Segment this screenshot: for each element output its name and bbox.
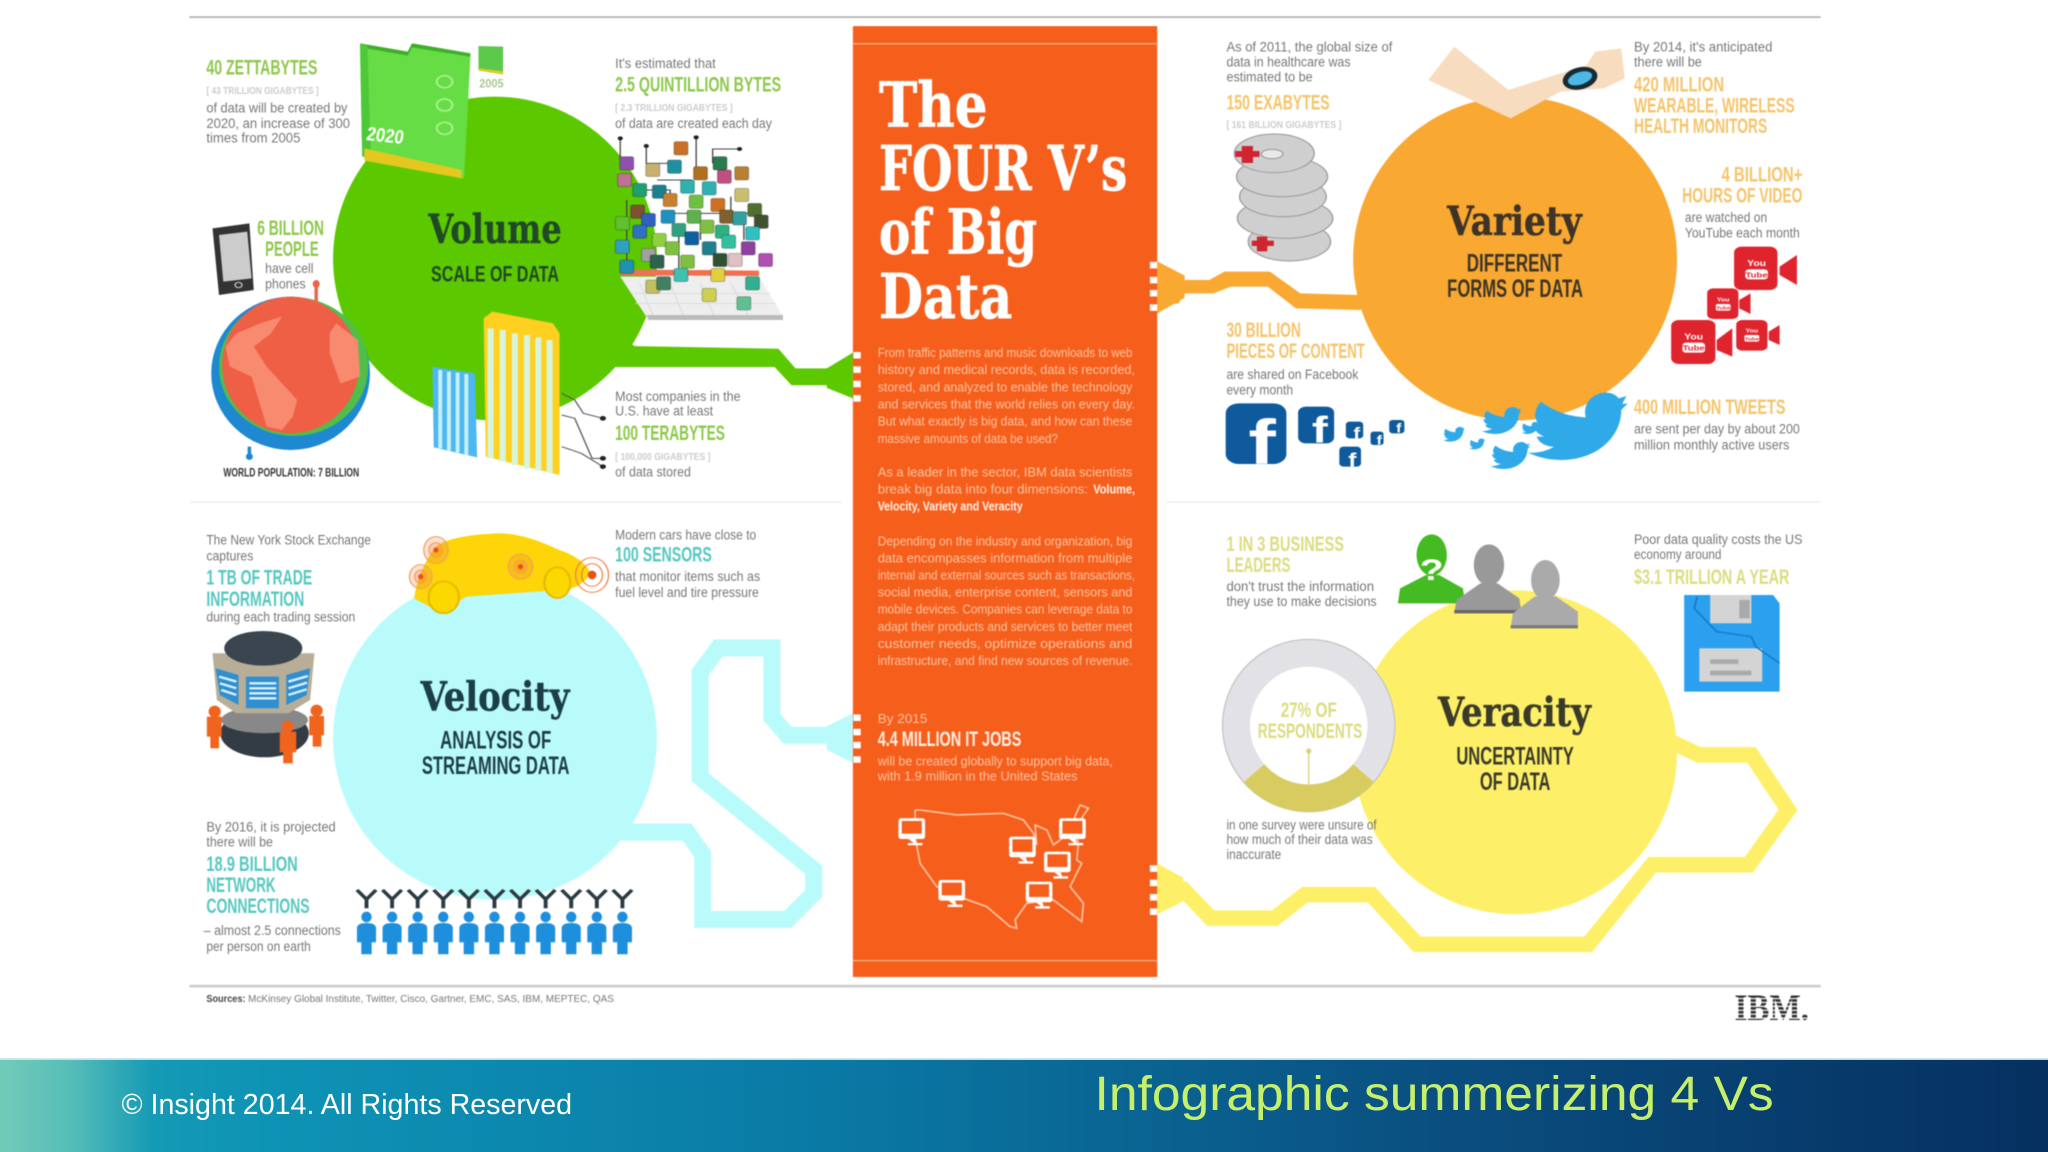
- sources: McKinsey Global Institute, Twitter, Cisco, Gartner, EMC, SAS, IBM, MEPTEC, QAS: [248, 994, 614, 1005]
- panel: veracity: [1157, 532, 1802, 944]
- stat: 40 zettabytes: of data will be created by: [206, 100, 348, 115]
- circle: veracity: [1353, 590, 1677, 914]
- icon: youtube cameras: Tube: [1683, 344, 1705, 352]
- text: survey note: [1226, 817, 1377, 862]
- stat: 150 exabytes: [ 161 BILLION GIGABYTES ]: [1226, 120, 1341, 131]
- text: survey note: how much of their data was: [1226, 832, 1373, 847]
- stat: 150 exabytes: As of 2011, the global size of: [1226, 40, 1392, 55]
- stat: 4.4 million IT jobs: 4.4 MILLION IT JOBS: [878, 728, 1021, 751]
- icon: business leaders: [1398, 534, 1578, 628]
- stat: 3.1 trillion: [1634, 532, 1802, 589]
- stat: 1 TB of trade information: 1 TB OF TRADE: [206, 566, 312, 589]
- panel bottom line: [853, 960, 1157, 961]
- stat: 100 terabytes: Most companies in the: [615, 389, 741, 404]
- footer copyright: © Insight 2014. All Rights Reserved: [121, 1089, 572, 1121]
- stat: 30 billion pieces: 30 BILLION: [1226, 319, 1301, 342]
- connector: veracity to centre: [1157, 739, 1788, 944]
- subheading: uncertainty of data: OF DATA: [1480, 769, 1550, 796]
- text: industry paragraph: adapt their products and services to better meet: [878, 619, 1133, 634]
- connector: volume to centre: [614, 333, 853, 398]
- chart: 27 percent donut: [1223, 639, 1395, 812]
- stat: 400 million tweets: million monthly active users: [1634, 437, 1790, 452]
- text: intro: and services that the world relies on every day.: [878, 396, 1135, 411]
- icon: business leaders: ?: [1420, 553, 1444, 587]
- stat: 400 million tweets: are sent per day by about 200: [1634, 422, 1800, 437]
- circle: velocity: [333, 576, 657, 900]
- text: intro: history and medical records, data is recorded,: [878, 362, 1135, 377]
- text: four dimensions: As a leader in the sector, IBM data scientists: [878, 465, 1133, 480]
- stat: 1 in 3 business leaders: LEADERS: [1226, 554, 1290, 577]
- icon: stock exchange server: [207, 631, 324, 763]
- subheading: different forms of data: FORMS OF DATA: [1447, 276, 1583, 303]
- stat: 4 billion hours: YouTube each month: [1685, 226, 1800, 241]
- icon: youtube cameras: Tube: [1745, 337, 1759, 342]
- stat: 1 TB of trade information: captures: [206, 548, 254, 563]
- stat: 18.9 billion connections: CONNECTIONS: [206, 895, 310, 918]
- stat: 4 billion hours: 4 BILLION+: [1721, 164, 1802, 187]
- stat: 30 billion pieces: are shared on Facebook: [1226, 367, 1358, 382]
- stat: 18.9 billion connections: 18.9 BILLION: [206, 853, 298, 876]
- icon: youtube cameras: You: [1684, 332, 1704, 341]
- top rule: [189, 16, 1821, 18]
- stat: 2.5 quintillion bytes: [615, 56, 781, 131]
- icon: healthcare discs: [1234, 134, 1333, 261]
- chart: 27 percent donut: RESPONDENTS: [1258, 720, 1362, 743]
- bottom rule: [189, 985, 1821, 987]
- infographic: [189, 16, 1821, 1028]
- stat: 6 billion people: phones: [265, 277, 306, 292]
- stat: 4.4 million IT jobs: with 1.9 million in the United States: [877, 769, 1078, 784]
- icon: data centre buildings: [432, 312, 606, 475]
- text: industry paragraph: infrastructure, and find new sources of revenue.: [878, 653, 1132, 668]
- icon: network people row: [357, 890, 632, 954]
- icon: broken floppy disk: [1684, 595, 1780, 692]
- text: four dimensions: Volume,: [1093, 482, 1135, 497]
- chart: 27 percent donut: 27% OF: [1281, 699, 1337, 722]
- stat: 4.4 million IT jobs: By 2015: [878, 711, 927, 726]
- stat: 4 billion hours: HOURS OF VIDEO: [1682, 184, 1802, 207]
- stat: 18.9 billion connections: By 2016, it is projected: [206, 819, 336, 834]
- stat: 100 terabytes: [615, 389, 741, 480]
- stat: 40 zettabytes: [206, 56, 350, 145]
- footer caption: Infographic summerizing 4 Vs: [1095, 1067, 1774, 1121]
- text: four dimensions: Velocity, Variety and Veracity: [878, 499, 1023, 514]
- icon: memory cards: [360, 43, 504, 178]
- stat: 100 terabytes: U.S. have at least: [615, 403, 713, 418]
- title: Data: [879, 261, 1012, 333]
- connector tabs: velocity: [853, 714, 861, 763]
- text: survey note: inaccurate: [1226, 847, 1282, 862]
- icon: twitter birds: [1443, 393, 1628, 469]
- panel: velocity: [204, 527, 853, 954]
- icon: facebook logos: f: [1353, 424, 1361, 442]
- stat: 150 exabytes: estimated to be: [1226, 70, 1313, 85]
- icon: facebook logos: f: [1312, 410, 1329, 451]
- stat: 30 billion pieces: PIECES OF CONTENT: [1226, 340, 1365, 363]
- icon: youtube cameras: You: [1746, 328, 1758, 334]
- stat: 4.4 million IT jobs: will be created globally to support big data,: [877, 753, 1113, 768]
- circle: variety: [1353, 97, 1677, 421]
- icon: facebook logos: f: [1348, 449, 1357, 471]
- stat: 400 million tweets: [1634, 396, 1800, 452]
- stat: 2.5 quintillion bytes: [ 2.3 TRILLION GIGABYTES ]: [615, 103, 733, 114]
- icon: facebook logos: f: [1248, 406, 1276, 478]
- heading: Variety: Variety: [1446, 197, 1583, 245]
- text: intro: [878, 345, 1135, 446]
- stat: 2.5 quintillion bytes: It's estimated that: [615, 56, 716, 71]
- stat: 100 sensors: [615, 527, 760, 600]
- stat: 18.9 billion connections: [204, 819, 341, 954]
- icon: facebook logos: f: [1376, 434, 1382, 448]
- text: four dimensions: break big data into four dimensions:: [878, 482, 1088, 497]
- stat: 18.9 billion connections: – almost 2.5 connections: [204, 923, 341, 938]
- stat: 40 zettabytes: 40 ZETTABYTES: [206, 56, 317, 79]
- icon: youtube cameras: Tube: [1746, 270, 1768, 279]
- middle rule left: [189, 502, 842, 503]
- icon: youtube cameras: Tube: [1716, 306, 1730, 311]
- stat: 420 million monitors: HEALTH MONITORS: [1634, 115, 1767, 138]
- stat: 3.1 trillion: economy around: [1634, 547, 1721, 562]
- icon: data cube grid: [615, 135, 783, 320]
- stat: 150 exabytes: data in healthcare was: [1226, 55, 1351, 70]
- stat: 1 in 3 business leaders: 1 IN 3 BUSINESS: [1226, 533, 1344, 556]
- subheading: analysis of streaming data: STREAMING DATA: [422, 753, 570, 780]
- stat: 18.9 billion connections: NETWORK: [206, 874, 276, 897]
- middle rule right: [1166, 502, 1821, 503]
- stat: 1 in 3 business leaders: they use to make decisions: [1226, 594, 1377, 609]
- subheading: different forms of data: DIFFERENT: [1467, 251, 1562, 278]
- stat: 6 billion people: PEOPLE: [265, 238, 319, 261]
- text: industry paragraph: [878, 533, 1135, 668]
- stat: 420 million monitors: 420 MILLION: [1634, 73, 1724, 96]
- icon: arm with health monitor: [1428, 47, 1625, 118]
- stat: 100 terabytes: 100 TERABYTES: [615, 422, 725, 445]
- stat: 4 billion hours: [1682, 164, 1802, 241]
- text: intro: stored, and analyzed to enable the technology: [878, 379, 1133, 394]
- text: industry paragraph: customer needs, optimize operations and: [878, 636, 1132, 651]
- stat: 420 million monitors: there will be: [1634, 55, 1702, 70]
- connector: velocity to centre: [614, 648, 853, 920]
- heading: Velocity: Velocity: [420, 673, 571, 721]
- footer band: [0, 1058, 2048, 1152]
- subheading: uncertainty of data: UNCERTAINTY: [1456, 744, 1574, 771]
- icon: youtube cameras: You: [1747, 259, 1766, 268]
- heading: Volume: Volume: [428, 205, 562, 253]
- stat: 150 exabytes: 150 EXABYTES: [1226, 92, 1330, 115]
- stat: 4 billion hours: are watched on: [1685, 210, 1767, 225]
- connector tabs: volume: [853, 352, 861, 402]
- stat: 2.5 quintillion bytes: 2.5 QUINTILLION BYTES: [615, 73, 781, 96]
- icon: facebook logos: f: [1396, 422, 1402, 436]
- title: FOUR V’s: [879, 133, 1127, 205]
- icon: phone: [213, 223, 254, 295]
- text: industry paragraph: data encompasses information from multiple: [878, 550, 1132, 565]
- text: industry paragraph: internal and external sources such as transactions,: [878, 568, 1135, 583]
- stat: 420 million monitors: By 2014, it's anticipated: [1634, 40, 1772, 55]
- stat: 2.5 quintillion bytes: of data are created each day: [615, 116, 772, 131]
- panel: volume: [206, 43, 853, 480]
- text: industry paragraph: Depending on the industry and organization, big: [878, 533, 1132, 548]
- stat: 100 terabytes: [ 100,000 GIGABYTES ]: [615, 452, 711, 463]
- stat: 1 in 3 business leaders: don't trust the information: [1226, 579, 1374, 594]
- connector: variety to centre: [1157, 263, 1361, 310]
- stat: 1 TB of trade information: [206, 533, 371, 625]
- stat: 100 sensors: 100 SENSORS: [615, 544, 712, 567]
- title: The: [879, 70, 987, 142]
- subheading: different forms of data: [1447, 251, 1583, 303]
- connector tabs: variety: [1150, 262, 1157, 311]
- stat: 3.1 trillion: Poor data quality costs the US: [1634, 532, 1802, 547]
- subheading: analysis of streaming data: ANALYSIS OF: [440, 727, 551, 754]
- label: world population: WORLD POPULATION: 7 BILLION: [223, 467, 359, 480]
- icon: memory cards: 2005: [479, 76, 504, 90]
- text: intro: massive amounts of data be used?: [878, 431, 1058, 446]
- stat: 1 in 3 business leaders: [1226, 533, 1377, 609]
- stat: 400 million tweets: 400 MILLION TWEETS: [1634, 396, 1786, 419]
- stat: 30 billion pieces: [1226, 319, 1365, 397]
- stat: 40 zettabytes: times from 2005: [206, 130, 301, 145]
- panel top line: [853, 43, 1157, 44]
- plug: variety: [1157, 261, 1185, 313]
- stat: 1 TB of trade information: INFORMATION: [206, 588, 304, 611]
- orange panel background: [853, 26, 1157, 977]
- stat: 6 billion people: [257, 217, 324, 292]
- stat: 420 million monitors: WEARABLE, WIRELESS: [1634, 94, 1795, 117]
- icon: car with sensors: [409, 533, 609, 613]
- panel: variety: [1157, 40, 1802, 478]
- stat: 420 million monitors: [1634, 40, 1795, 138]
- stat: 3.1 trillion: $3.1 TRILLION A YEAR: [1634, 566, 1789, 589]
- text: industry paragraph: social media, enterprise content, sensors and: [878, 585, 1132, 600]
- stat: 100 sensors: that monitor items such as: [615, 569, 760, 584]
- icon: youtube cameras: You: [1717, 297, 1730, 303]
- stat: 30 billion pieces: every month: [1226, 382, 1293, 397]
- panel: centre column: [853, 26, 1157, 977]
- subheading: analysis of streaming data: [422, 727, 570, 780]
- sources: Sources:: [206, 994, 246, 1005]
- icon: youtube cameras: [1671, 247, 1797, 364]
- stat: 100 terabytes: of data stored: [615, 465, 691, 480]
- text: intro: But what exactly is big data, and how can these: [878, 414, 1132, 429]
- stat: 6 billion people: have cell: [265, 261, 313, 276]
- logo: IBM: IBM.: [1735, 987, 1809, 1028]
- stat: 18.9 billion connections: per person on earth: [206, 939, 311, 954]
- text: intro: From traffic patterns and music downloads to web: [878, 345, 1132, 360]
- text: four dimensions: [878, 465, 1135, 514]
- circle: volume: [333, 97, 657, 421]
- stat: 40 zettabytes: 2020, an increase of 300: [206, 116, 350, 131]
- text: survey note: in one survey were unsure of: [1226, 817, 1377, 832]
- heading: Veracity: Veracity: [1437, 688, 1592, 736]
- icon: memory cards: 2020: [365, 123, 406, 148]
- stat: 6 billion people: 6 BILLION: [257, 217, 324, 240]
- stat: 4.4 million IT jobs: [877, 711, 1113, 784]
- stat: 1 TB of trade information: The New York Stock Exchange: [206, 533, 371, 548]
- icon: US map with monitors: [898, 805, 1088, 928]
- stat: 150 exabytes: [1226, 40, 1392, 131]
- icon: globe: [211, 280, 370, 460]
- text: industry paragraph: mobile devices. Companies can leverage data to: [878, 602, 1132, 617]
- stat: 100 sensors: fuel level and tire pressure: [615, 585, 759, 600]
- subheading: uncertainty of data: [1456, 744, 1574, 796]
- connector tabs: veracity: [1150, 865, 1157, 915]
- stat: 18.9 billion connections: there will be: [206, 834, 273, 849]
- subheading: scale of data: SCALE OF DATA: [431, 261, 559, 286]
- stat: 1 TB of trade information: during each trading session: [206, 610, 355, 625]
- title: [879, 70, 1127, 333]
- stat: 40 zettabytes: [ 43 TRILLION GIGABYTES ]: [206, 86, 319, 97]
- stat: 100 sensors: Modern cars have close to: [615, 527, 757, 542]
- icon: facebook logos: [1226, 403, 1404, 478]
- title: of Big: [879, 196, 1037, 268]
